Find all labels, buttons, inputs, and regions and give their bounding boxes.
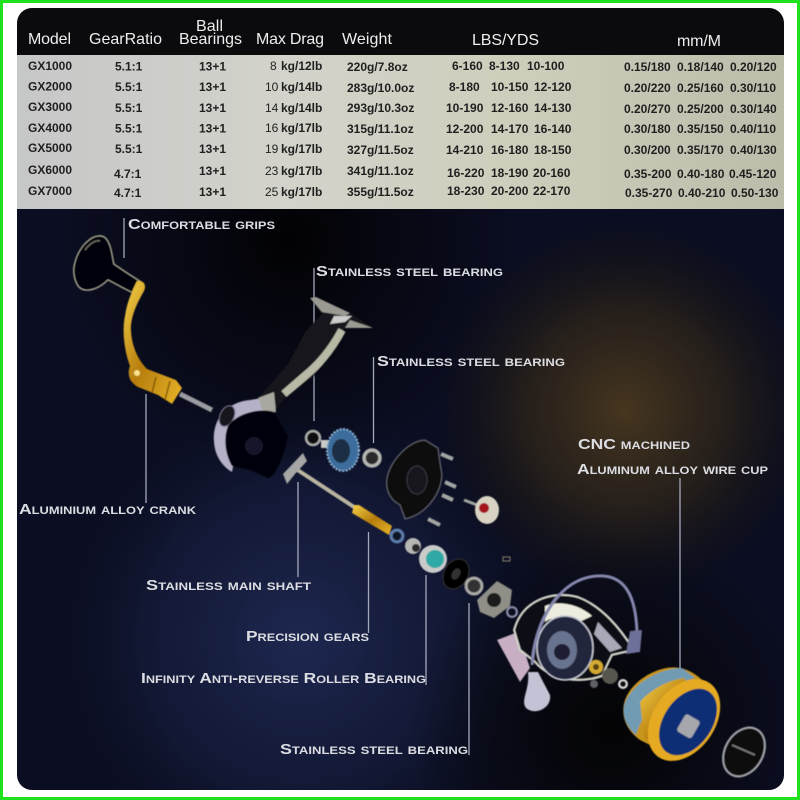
model column: GX1000 [28, 59, 72, 73]
ball bearings column: 13+1 [199, 101, 226, 115]
max drag column: 8 [270, 59, 277, 73]
model column: GX2000 [28, 80, 72, 94]
max drag column: kg/17lb [281, 185, 322, 199]
max drag column: kg/14lb [281, 101, 322, 115]
part labels [19, 216, 768, 758]
reel body and foot [214, 297, 373, 478]
mm per metres column: 0.20/270 [624, 102, 671, 116]
max drag column: kg/17lb [281, 142, 322, 156]
mm per metres column: 0.40/130 [730, 143, 777, 157]
max drag column: kg/14lb [281, 80, 322, 94]
label: infinity anti-reverse roller bearing: Infinity Anti-reverse Roller Bearing [141, 670, 426, 687]
model column: GX7000 [28, 184, 72, 198]
gear ratio column: 5.5:1 [115, 142, 143, 156]
side cover plate [387, 440, 442, 519]
table header bar: GearRatio [89, 31, 162, 48]
gear ratio column: 5.5:1 [115, 80, 143, 94]
max drag column: kg/12lb [281, 59, 322, 73]
dark diagram background [17, 209, 784, 790]
drag cap [721, 726, 767, 778]
mm per metres column: 0.18/140 [677, 60, 724, 74]
red drag knob [475, 496, 499, 524]
table header bar: mm/M [677, 33, 721, 50]
lbs per yards column: 10-150 [491, 80, 529, 94]
handle knob [74, 236, 140, 293]
model column [28, 59, 72, 198]
cover screws [428, 454, 477, 525]
ball bearings column: 13+1 [199, 80, 226, 94]
lbs per yards column: 10-100 [527, 59, 565, 73]
lbs per yards column: 8-180 [449, 80, 480, 94]
weight column: 355g/11.5oz [347, 185, 414, 199]
max drag column: 23 [265, 164, 279, 178]
mm per metres column: 0.35/150 [677, 122, 724, 136]
lbs per yards column: 12-160 [491, 101, 529, 115]
table header bar: Ball [196, 18, 223, 35]
weight column: 293g/10.3oz [347, 101, 414, 115]
label: aluminium alloy crank: Aluminium alloy crank [19, 501, 196, 518]
mm per metres column: 0.35/170 [677, 143, 724, 157]
max drag column: kg/17lb [281, 164, 322, 178]
lbs per yards column: 14-130 [534, 101, 572, 115]
mm per metres column: 0.35-200 [624, 167, 672, 181]
weight column [347, 60, 414, 199]
model column: GX5000 [28, 141, 72, 155]
max drag column: 10 [265, 80, 279, 94]
mm per metres column: 0.25/160 [677, 81, 724, 95]
lbs per yards column: 18-150 [534, 143, 572, 157]
label: stainless main shaft: Stainless main shaft [146, 577, 311, 594]
lbs per yards column: 20-160 [533, 166, 571, 180]
lbs per yards column [446, 59, 572, 198]
weight column: 341g/11.1oz [347, 164, 414, 178]
mm per metres column: 0.20/120 [730, 60, 777, 74]
gold spool [622, 666, 721, 762]
lbs per yards column: 20-200 [491, 184, 529, 198]
lbs per yards column: 18-190 [491, 166, 529, 180]
bearing and gear set [306, 429, 380, 471]
lbs per yards column: 10-190 [446, 101, 484, 115]
gear ratio column [114, 60, 143, 200]
table header bar: Bearings [179, 31, 242, 48]
exploded reel illustration [74, 236, 773, 784]
lbs per yards column: 12-200 [446, 122, 484, 136]
lbs per yards column: 6-160 [452, 59, 483, 73]
mm per metres column: 0.40/110 [730, 122, 776, 136]
table header bar: Weight [342, 31, 393, 48]
max drag column: kg/17lb [281, 121, 322, 135]
small nut and washers [589, 660, 627, 688]
mm per metres column: 0.40-180 [677, 167, 725, 181]
leader lines [124, 218, 680, 755]
max drag column: 16 [265, 121, 279, 135]
ball bearings column: 13+1 [199, 164, 226, 178]
max drag column: 14 [265, 101, 279, 115]
gear ratio column: 5.1:1 [115, 60, 143, 74]
specification table [17, 55, 784, 209]
lbs per yards column: 16-220 [447, 166, 485, 180]
mm per metres column: 0.40-210 [678, 186, 726, 200]
label: CNC machined: CNC machined [578, 436, 690, 453]
max drag column [265, 59, 322, 199]
gold crank arm [124, 281, 212, 410]
max drag column: 25 [265, 185, 279, 199]
gear ratio column: 5.5:1 [115, 101, 143, 115]
weight column: 327g/11.5oz [347, 143, 414, 157]
model column: GX3000 [28, 100, 72, 114]
washers and bearings on shaft [391, 530, 517, 618]
lbs per yards column: 22-170 [533, 184, 571, 198]
model column: GX4000 [28, 121, 72, 135]
table header bar: Max Drag [256, 31, 324, 48]
table header bar: LBS/YDS [472, 32, 539, 49]
label: stainless steel bearing, upper: Stainless steel bearing [316, 263, 503, 280]
weight column: 220g/7.8oz [347, 60, 408, 74]
mm per metres column: 0.35-270 [625, 186, 673, 200]
mm per metres column: 0.30/200 [624, 143, 671, 157]
mm per metres column: 0.25/200 [677, 102, 724, 116]
lbs per yards column: 12-120 [534, 80, 572, 94]
gear ratio column: 5.5:1 [115, 122, 143, 136]
mm per metres column: 0.15/180 [624, 60, 671, 74]
lbs per yards column: 16-140 [534, 122, 572, 136]
lbs per yards column: 8-130 [489, 59, 520, 73]
lbs per yards column: 18-230 [447, 184, 485, 198]
ball bearings column: 13+1 [199, 122, 226, 136]
lbs per yards column: 16-180 [491, 143, 529, 157]
rotor with bail arm [497, 576, 642, 711]
label: precision gears: Precision gears [246, 628, 369, 645]
ball bearings column: 13+1 [199, 60, 226, 74]
mm per metres column: 0.30/110 [730, 81, 776, 95]
main shaft [283, 453, 392, 535]
lbs per yards column: 14-170 [491, 122, 529, 136]
weight column: 283g/10.0oz [347, 81, 414, 95]
label: comfortable grips: Comfortable grips [128, 216, 275, 233]
mm per metres column [624, 60, 779, 200]
ball bearings column: 13+1 [199, 185, 226, 199]
ball bearings column: 13+1 [199, 142, 226, 156]
mm per metres column: 0.30/140 [730, 102, 777, 116]
label: stainless steel bearing, middle: Stainless steel bearing [377, 353, 565, 370]
mm per metres column: 0.50-130 [731, 186, 779, 200]
mm per metres column: 0.20/220 [624, 81, 671, 95]
max drag column: 19 [265, 142, 279, 156]
table header bar: Model [28, 31, 71, 48]
label: stainless steel bearing, lower: Stainless steel bearing [280, 741, 468, 758]
mm per metres column: 0.30/180 [624, 122, 671, 136]
gear ratio column: 4.7:1 [114, 186, 142, 200]
mm per metres column: 0.45-120 [729, 167, 777, 181]
table header bar [17, 8, 784, 55]
ball bearings column [199, 60, 226, 199]
model column: GX6000 [28, 163, 72, 177]
gear ratio column: 4.7:1 [114, 167, 142, 181]
weight column: 315g/11.1oz [347, 122, 414, 136]
lbs per yards column: 14-210 [446, 143, 484, 157]
label: aluminum alloy wire cup: Aluminum alloy wire cup [577, 461, 768, 478]
